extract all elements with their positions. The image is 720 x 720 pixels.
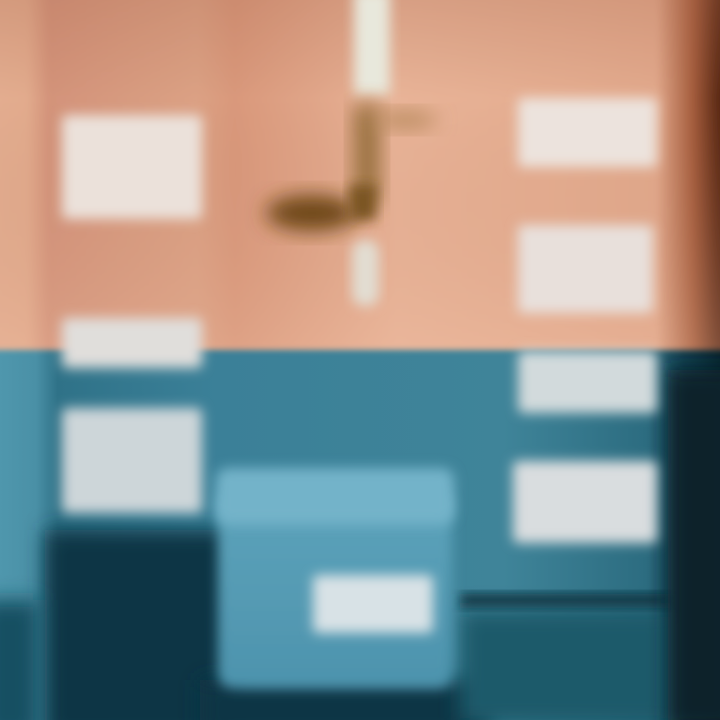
text block: right third label — [518, 351, 657, 413]
text block: left middle label — [62, 318, 202, 368]
text block: left upper label — [62, 115, 202, 219]
text block: right fourth label — [513, 461, 657, 543]
panel: upper skin background — [0, 0, 720, 350]
text block: right first label — [518, 98, 657, 167]
panel: lower teal background — [0, 340, 720, 720]
text block: left lower label — [62, 408, 202, 513]
icon: dropper — [266, 0, 437, 306]
icon: cream jar — [216, 468, 454, 688]
text block: right second label — [518, 225, 653, 313]
text block: jar label — [313, 575, 433, 633]
